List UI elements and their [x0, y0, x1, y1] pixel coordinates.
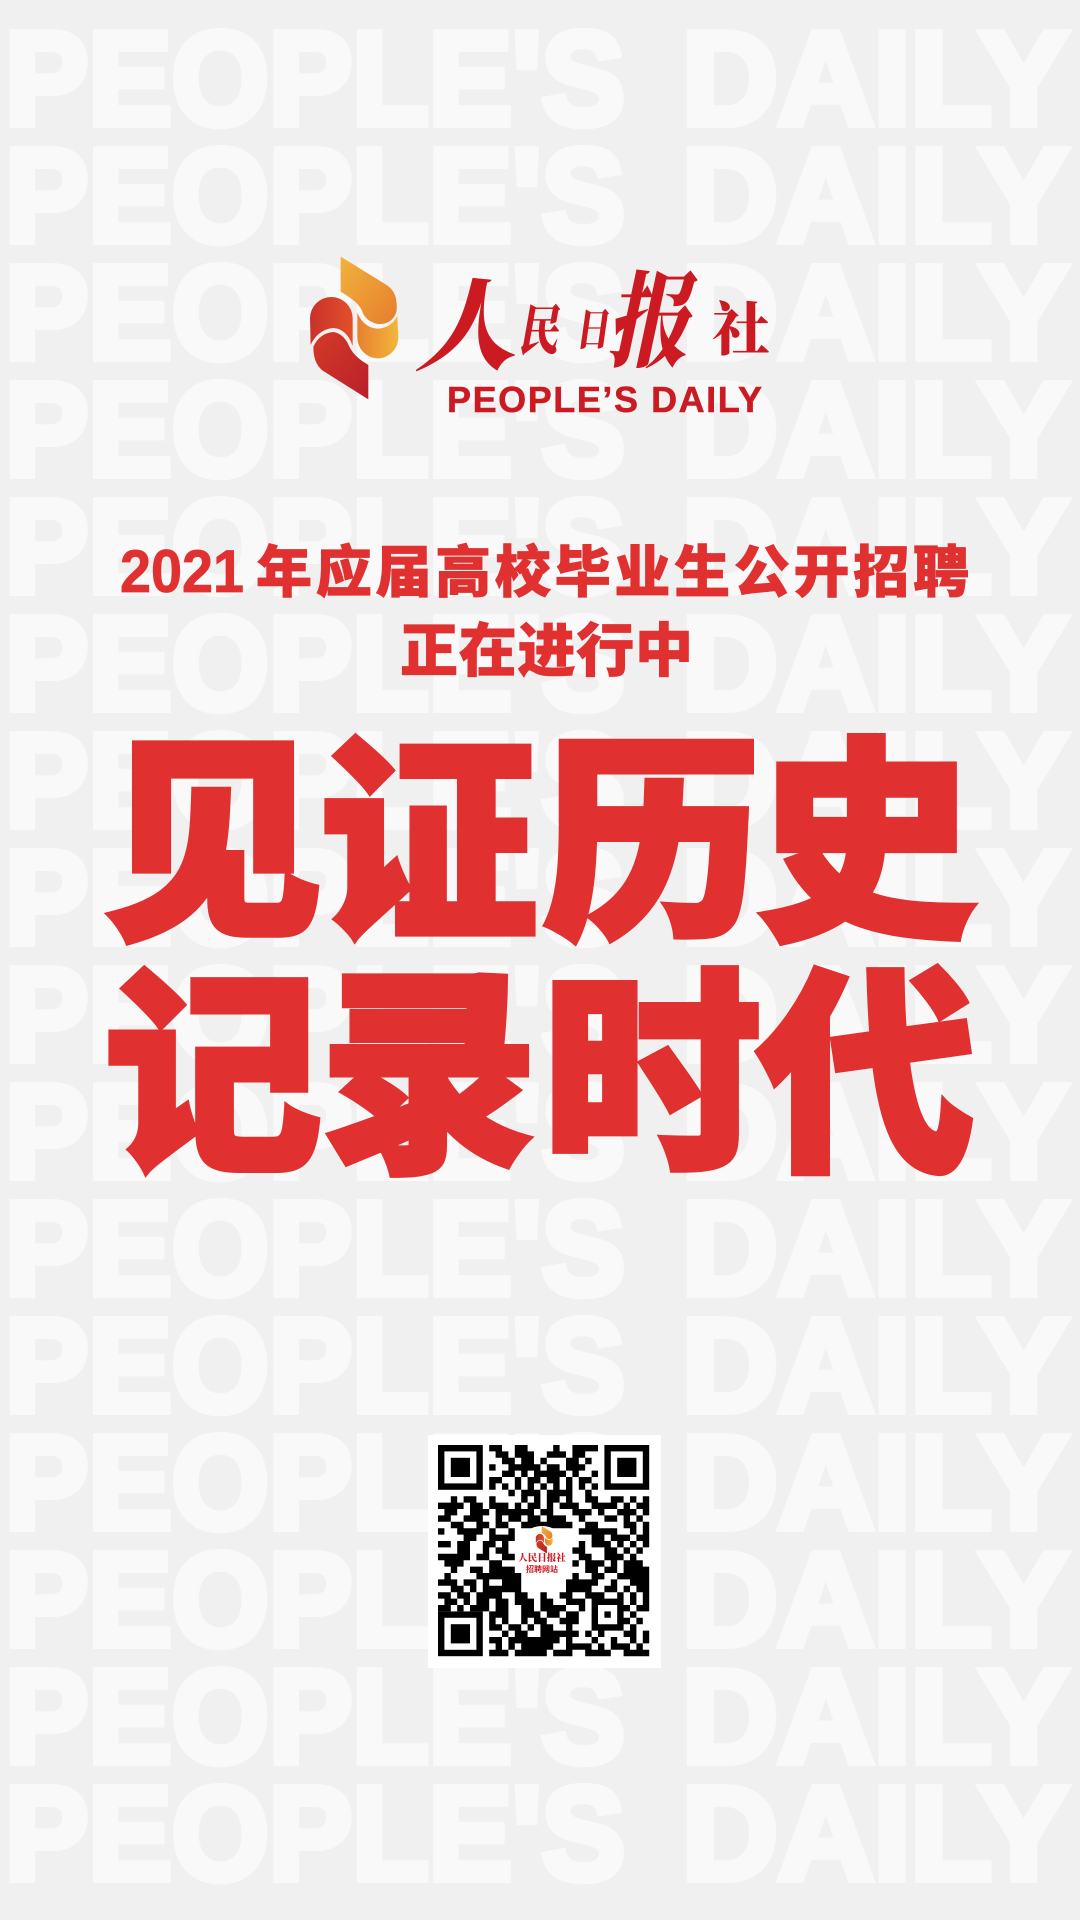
background pattern: repeated PEOPLE'S DAILY wordmark: DAILY	[682, 1526, 1068, 1673]
QR code	[428, 1435, 661, 1668]
data modules	[438, 1448, 649, 1653]
background pattern: repeated PEOPLE'S DAILY wordmark: DAILY	[682, 824, 1068, 971]
QR modules	[438, 1448, 649, 1653]
background pattern: repeated PEOPLE'S DAILY wordmark: PEOPLE'S	[5, 1760, 625, 1907]
background pattern: repeated PEOPLE'S DAILY wordmark: PEOPLE'S	[5, 1409, 625, 1556]
background pattern: repeated PEOPLE'S DAILY wordmark: DAILY	[682, 1292, 1068, 1439]
subheading line 1: 2021	[120, 538, 244, 605]
background pattern: repeated PEOPLE'S DAILY wordmark: PEOPLE'S	[5, 239, 625, 386]
background pattern: repeated PEOPLE'S DAILY wordmark: PEOPLE'S	[5, 941, 625, 1088]
background pattern: repeated PEOPLE'S DAILY wordmark: DAILY	[682, 122, 1068, 269]
background pattern: repeated PEOPLE'S DAILY wordmark: DAILY	[682, 941, 1068, 1088]
logo calligraphic name: 民	[515, 287, 569, 366]
background pattern: repeated PEOPLE'S DAILY wordmark: DAILY	[682, 239, 1068, 386]
QR centre logo badge: 人民日报社	[518, 1550, 566, 1564]
finder patterns	[441, 1448, 646, 1653]
QR centre logo badge	[516, 1526, 568, 1578]
logo: People's Daily	[310, 239, 770, 420]
background pattern: repeated PEOPLE'S DAILY wordmark: PEOPLE'S	[5, 824, 625, 971]
title line 1: 见证历史	[104, 725, 975, 968]
logo calligraphic name: 社	[712, 283, 770, 367]
logo calligraphic name: 日	[573, 296, 616, 358]
background pattern: repeated PEOPLE'S DAILY wordmark: DAILY	[682, 707, 1068, 854]
background pattern: repeated PEOPLE'S DAILY wordmark: PEOPLE'S	[5, 1643, 625, 1790]
subheading line 2: 正在进行中	[400, 619, 693, 684]
background pattern: repeated PEOPLE'S DAILY wordmark: DAILY	[682, 1409, 1068, 1556]
subheading line 1: 年应届高校毕业生公开招聘	[256, 541, 969, 604]
background pattern: repeated PEOPLE'S DAILY wordmark: DAILY	[682, 1760, 1068, 1907]
subheading	[120, 538, 969, 684]
background pattern: repeated PEOPLE'S DAILY wordmark: PEOPLE'S	[5, 1058, 625, 1205]
QR white card	[428, 1435, 661, 1668]
background pattern: repeated PEOPLE'S DAILY wordmark: PEOPLE'S	[5, 1292, 625, 1439]
logo English name: PEOPLE’S DAILY	[447, 379, 762, 420]
background pattern: repeated PEOPLE'S DAILY wordmark: PEOPLE'S	[5, 590, 625, 737]
background pattern: repeated PEOPLE'S DAILY wordmark: PEOPLE'S	[5, 1175, 625, 1322]
background pattern: repeated PEOPLE'S DAILY wordmark: PEOPLE'S	[5, 707, 625, 854]
logo calligraphic name	[408, 239, 770, 392]
title line 2: 记录时代	[104, 957, 975, 1200]
background pattern: repeated PEOPLE'S DAILY wordmark: PEOPLE'S	[5, 122, 625, 269]
main title	[104, 725, 975, 1200]
background pattern: repeated PEOPLE'S DAILY wordmark: DAILY	[682, 1643, 1068, 1790]
logo calligraphic name: 报	[600, 239, 712, 388]
background pattern: repeated PEOPLE'S DAILY wordmark: PEOPLE'S	[5, 473, 625, 620]
background pattern: repeated PEOPLE'S DAILY wordmark: PEOPLE'S	[5, 5, 625, 152]
icon: ribbon emblem	[310, 257, 398, 399]
background pattern: repeated PEOPLE'S DAILY wordmark: DAILY	[682, 1175, 1068, 1322]
logo calligraphic name: 人	[408, 248, 543, 392]
background pattern: repeated PEOPLE'S DAILY wordmark: DAILY	[682, 5, 1068, 152]
background pattern: repeated PEOPLE'S DAILY wordmark: DAILY	[682, 473, 1068, 620]
QR centre logo badge: 招聘网站	[526, 1564, 558, 1574]
background pattern: repeated PEOPLE'S DAILY wordmark: PEOPLE'S	[5, 356, 625, 503]
background pattern: repeated PEOPLE'S DAILY wordmark: PEOPLE'S	[5, 1526, 625, 1673]
background pattern: repeated PEOPLE'S DAILY wordmark: DAILY	[682, 590, 1068, 737]
background pattern: repeated PEOPLE'S DAILY wordmark: DAILY	[682, 1058, 1068, 1205]
background pattern: repeated PEOPLE'S DAILY wordmark: DAILY	[682, 356, 1068, 503]
